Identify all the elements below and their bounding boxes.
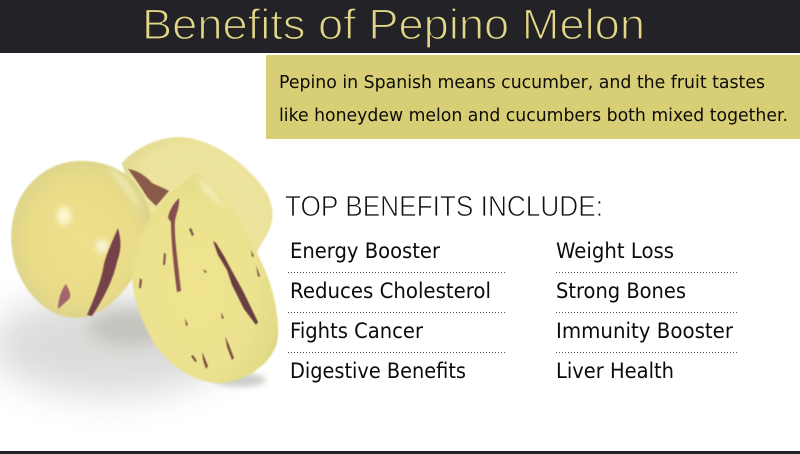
item: Reduces Cholesterol [290,279,491,303]
item: Digestive Benefits [290,359,466,383]
intro text: like honeydew melon and cucumbers both mixed together. [279,106,788,126]
fruit shadow [0,293,266,397]
item: Weight Loss [556,239,674,263]
title: Benefits of Pepino Melon [142,1,645,49]
title bar [0,0,800,53]
benefits list: left column [290,239,491,383]
item: Strong Bones [556,279,686,303]
item: Immunity Booster [556,319,733,343]
item: Liver Health [556,359,674,383]
intro text: Pepino in Spanish means cucumber, and the fruit tastes [279,73,765,93]
item: Fights Cancer [290,319,423,343]
intro callout [266,55,800,139]
benefits list: right column [556,239,733,383]
left melon [11,161,150,318]
back melon [122,137,272,290]
item: Energy Booster [290,239,440,263]
front melon [132,173,278,383]
bottom bar [0,451,800,454]
illustration: three pepino melons [11,137,278,383]
heading: top benefits: TOP BENEFITS INCLUDE: [285,191,603,223]
